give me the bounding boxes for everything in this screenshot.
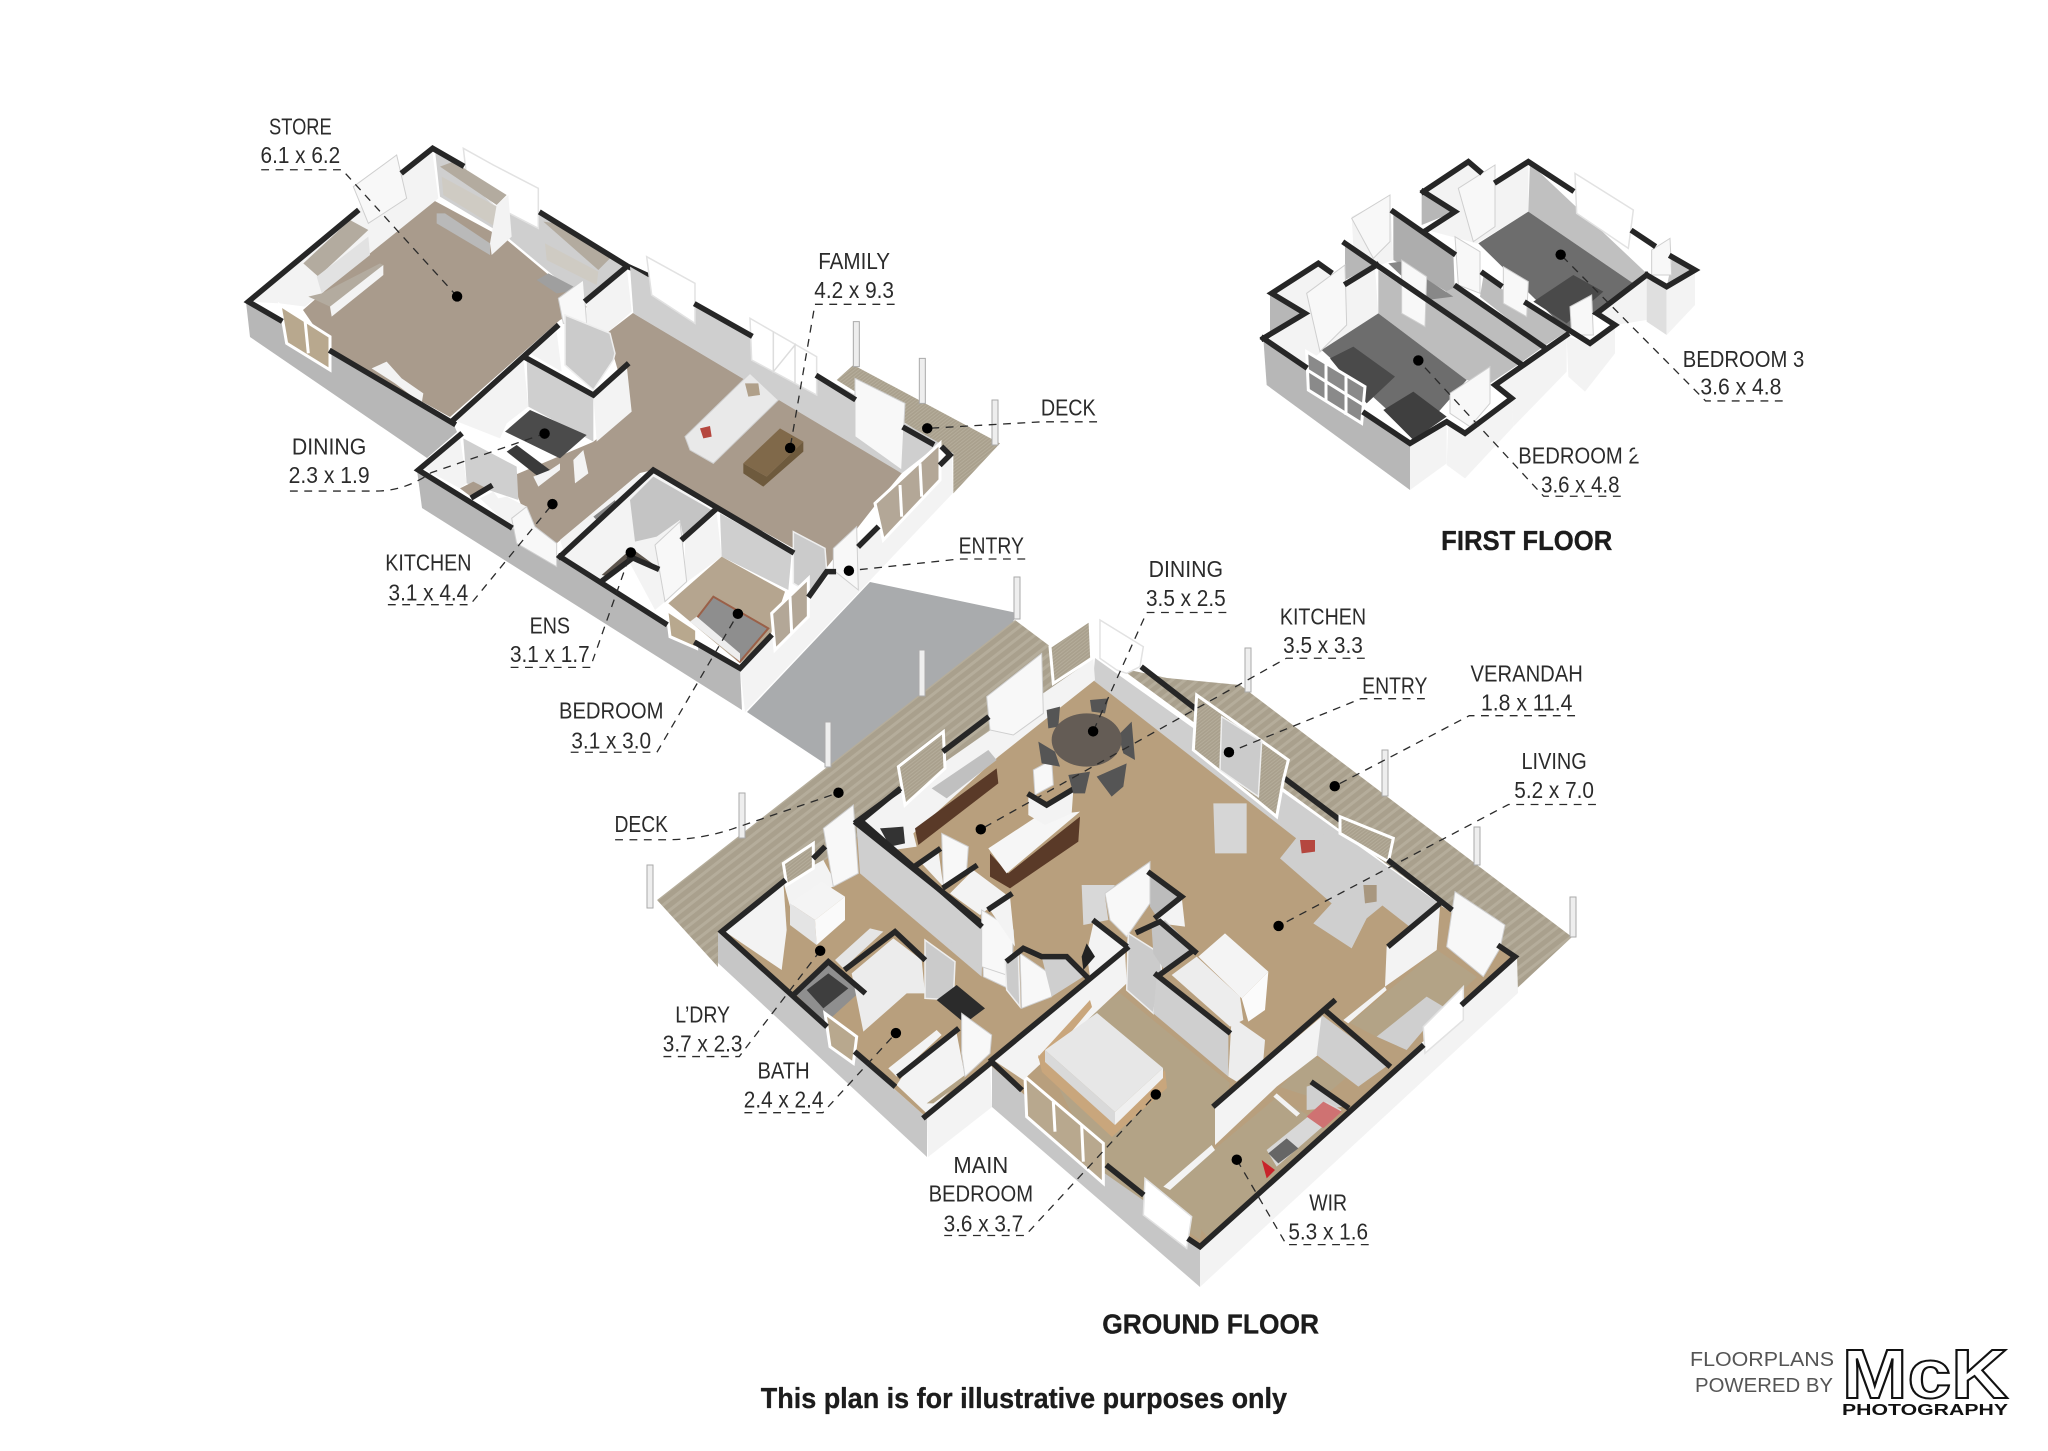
- island bench: [988, 760, 1080, 888]
- hallway walls: [860, 830, 1015, 977]
- deck: ground floor rear deck: [657, 620, 1095, 967]
- label: main bedroom: [929, 1089, 1161, 1237]
- label: dining: [1088, 556, 1226, 737]
- label: upper kitchen: 3.1 x 4.4: [389, 580, 468, 606]
- label: upper dining: 2.3 x 1.9: [289, 462, 370, 488]
- outer walls: [718, 932, 1518, 1287]
- panel: main ground floor plan: [718, 620, 1518, 1287]
- label: bedroom 2: [1413, 355, 1643, 497]
- label: main bedroom: BEDROOM: [929, 1181, 1033, 1207]
- logo: McK photography: FLOORPLANS: [1690, 1349, 1834, 1371]
- label: upper entry: ENTRY: [959, 533, 1024, 559]
- family wall: [630, 267, 940, 473]
- label: walk-in robe: WIR: [1309, 1190, 1347, 1216]
- sofa: [685, 373, 778, 463]
- label: living: 5.2 x 7.0: [1514, 777, 1594, 803]
- deck posts: [853, 322, 998, 445]
- kitchen and living: [860, 620, 1340, 1080]
- label: store: [261, 114, 462, 302]
- label: store: 6.1 x 6.2: [261, 142, 340, 168]
- label: upper deck: DECK: [1041, 394, 1096, 420]
- dining walls: [423, 358, 632, 567]
- white wall behind bed: [993, 950, 1127, 1080]
- deck posts: [647, 577, 1576, 937]
- logo: McK photography: [1690, 1335, 2008, 1419]
- label: family: 4.2 x 9.3: [814, 277, 894, 303]
- label: bedroom 2: BEDROOM 2: [1518, 443, 1640, 469]
- store doors and windows: [280, 155, 632, 390]
- ensuite and bedroom: [560, 470, 808, 663]
- dining table: [505, 410, 588, 487]
- label: bath: BATH: [757, 1058, 810, 1084]
- label: upper kitchen: [385, 499, 558, 606]
- heading: first floor: FIRST FLOOR: [1441, 525, 1612, 556]
- coffee table: [743, 428, 803, 487]
- label: ensuite: [510, 547, 636, 667]
- main bedroom window: [1025, 1077, 1103, 1183]
- label: upper entry: [844, 533, 1025, 576]
- label: verandah: 1.8 x 11.4: [1481, 689, 1573, 715]
- interior faces: [1268, 162, 1695, 383]
- label: bath: 2.4 x 2.4: [744, 1086, 824, 1112]
- window and door: entry on verandah: [1193, 695, 1288, 817]
- logo: McK photography: POWERED BY: [1695, 1375, 1833, 1397]
- label: kitchen: [976, 603, 1366, 835]
- living north-east wall: [1093, 658, 1437, 927]
- stair and closets: [1005, 862, 1195, 1013]
- label: lower deck: [614, 788, 844, 840]
- label: dining: 3.5 x 2.5: [1146, 585, 1226, 611]
- bedroom walls: [1153, 977, 1388, 1145]
- plan left detail: [248, 147, 647, 567]
- deck: verandah: [1120, 668, 1572, 993]
- label: bedroom 3: [1555, 249, 1804, 401]
- panel: first floor plan: [1263, 162, 1695, 490]
- label: ensuite: ENS: [530, 612, 570, 638]
- panel: upper ground floor plan: [246, 147, 998, 712]
- label: entry: ENTRY: [1362, 672, 1427, 698]
- laundry and bath: [722, 790, 1103, 1183]
- concrete driveway: [747, 582, 1017, 767]
- label: upper bedroom: [559, 609, 743, 753]
- label: upper deck: [922, 394, 1097, 434]
- walls top: [1263, 162, 1695, 443]
- outer walls: [246, 302, 953, 712]
- heading: ground floor: GROUND FLOOR: [1102, 1308, 1319, 1339]
- label: main bedroom: MAIN: [953, 1152, 1008, 1178]
- laundry walls top: [722, 790, 1020, 1117]
- floors: [303, 200, 902, 567]
- room labels: [261, 114, 1804, 1415]
- disclaimer: This plan is for illustrative purposes only: [761, 1383, 1287, 1415]
- armchairs: [1082, 803, 1247, 925]
- label: kitchen: KITCHEN: [1280, 603, 1366, 629]
- beds: [1330, 275, 1603, 440]
- label: laundry: [663, 946, 825, 1057]
- label: laundry: 3.7 x 2.3: [663, 1030, 742, 1056]
- label: walk-in robe: 5.3 x 1.6: [1288, 1218, 1368, 1244]
- doors and windows: [1307, 165, 1672, 427]
- windows and doors: [647, 257, 940, 593]
- label: upper bedroom: BEDROOM: [559, 697, 663, 723]
- label: upper dining: DINING: [292, 433, 366, 459]
- logo: McK photography: McK: [1842, 1335, 2008, 1413]
- store shelving: [303, 162, 610, 403]
- logo: McK photography: PHOTOGRAPHY: [1842, 1402, 2008, 1419]
- floors: [718, 680, 1517, 1247]
- bath fittings: [825, 938, 992, 1113]
- label: verandah: VERANDAH: [1471, 661, 1583, 687]
- bedroom and right wing: [1108, 817, 1515, 1248]
- label: verandah: [1330, 661, 1583, 791]
- sofa: [1280, 825, 1393, 948]
- label: bedroom 2: 3.6 x 4.8: [1541, 471, 1619, 497]
- laundry walls: [725, 805, 1013, 990]
- label: bedroom 3: BEDROOM 3: [1683, 346, 1804, 372]
- carpets: [1322, 212, 1633, 437]
- kitchen walls top: [862, 668, 1340, 1060]
- label: walk-in robe: [1232, 1155, 1369, 1245]
- label: dining: DINING: [1149, 556, 1223, 582]
- stairs: [1172, 933, 1268, 1027]
- washer: [790, 882, 883, 968]
- label: lower deck: DECK: [614, 811, 668, 837]
- label: upper kitchen: KITCHEN: [385, 550, 471, 576]
- label: bath: [744, 1028, 901, 1113]
- label: family: [785, 248, 895, 453]
- label: living: [1273, 748, 1596, 931]
- label: ensuite: 3.1 x 1.7: [510, 641, 590, 667]
- label: store: STORE: [269, 114, 332, 140]
- plan right detail: [560, 257, 998, 668]
- shower: [795, 965, 860, 1023]
- store walls: [248, 147, 623, 307]
- dining table and chairs: [1038, 698, 1135, 797]
- store walls top: [248, 148, 647, 527]
- label: main bedroom: 3.6 x 3.7: [944, 1211, 1023, 1237]
- family walls top: [560, 305, 950, 668]
- deck: upper plan deck: [837, 365, 1000, 493]
- label: kitchen: 3.5 x 3.3: [1283, 632, 1363, 658]
- right room furniture and windows: [1143, 987, 1463, 1248]
- label: upper bedroom: 3.1 x 3.0: [571, 727, 651, 753]
- label: upper dining: [289, 428, 550, 491]
- label: entry: [1224, 672, 1427, 757]
- outer walls: [1263, 192, 1695, 490]
- wardrobe items: [1262, 1102, 1342, 1178]
- main bed: [1038, 1000, 1167, 1137]
- right walls top: [1108, 862, 1515, 1247]
- label: bedroom 3: 3.6 x 4.8: [1700, 373, 1781, 399]
- kitchen wall: [862, 620, 1143, 850]
- right room walls: [1163, 817, 1505, 1190]
- label: family: FAMILY: [818, 248, 890, 274]
- label: laundry: L’DRY: [675, 1002, 730, 1028]
- label: living: LIVING: [1521, 748, 1587, 774]
